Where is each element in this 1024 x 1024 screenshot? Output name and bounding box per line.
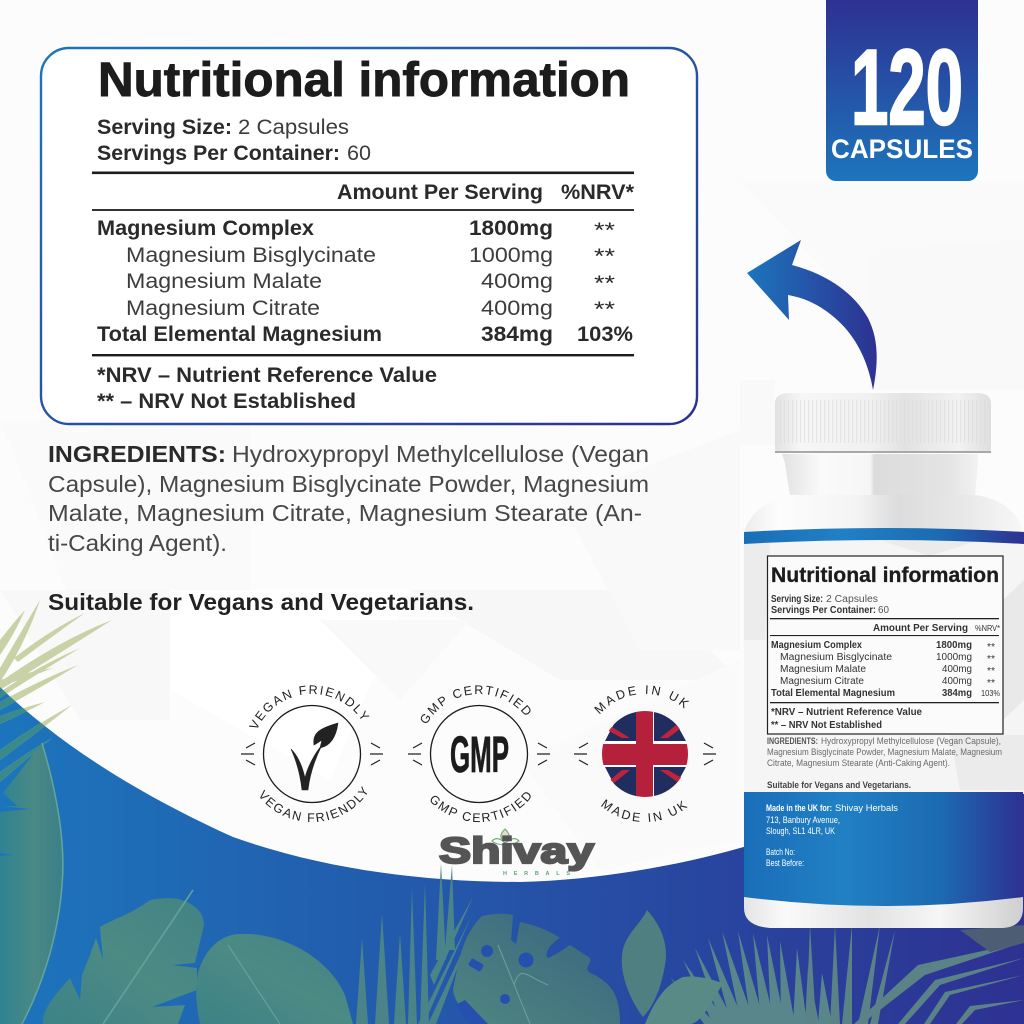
serving size: Servings Per Container: [97,142,340,165]
mini nutrition box: ** [987,666,995,677]
ingredients text: ti-Caking Agent). [48,530,227,556]
mini nutrition box: Amount Per Serving [873,623,968,634]
badge: GMP certified: GMP CERTIFIED [420,685,530,723]
mini nutrition box: ** [987,654,995,665]
arrow pointing to bottle [747,240,877,390]
badge: vegan friendly [241,685,383,822]
ingredients text: Capsule), Magnesium Bisglycinate Powder, Magnesium [48,471,649,497]
table rows: 384mg [481,323,553,346]
badge: made in UK [574,685,716,822]
manufacturer details: Slough, SL1 4LR, UK [766,826,835,837]
label facets [744,540,1024,790]
footnotes [97,364,437,413]
bottle cap [775,393,991,453]
footnotes: ** – NRV Not Established [97,390,356,413]
badge: 120 capsules: CAPSULES [831,134,973,164]
serving size [97,116,371,165]
table rows: ** [594,272,615,295]
serving size: Serving Size: [97,116,232,139]
UK flag icon [600,709,690,799]
manufacturer details: Best Before: [766,858,804,869]
mini nutrition box: 384mg [942,688,972,699]
leaf: banana [43,890,204,1024]
suitability statement: Suitable for Vegans and Vegetarians. [48,589,474,615]
dark corner shadow [960,925,1024,952]
bottle shoulder [744,495,1024,545]
bottle base [744,890,1023,928]
ingredients text [48,441,649,556]
mini ingredients text: INGREDIENTS: [767,735,818,746]
mini nutrition box: ** [987,642,995,653]
table rows: 103% [577,323,633,346]
palm right [806,925,1024,1024]
panel shadow [42,49,698,425]
mini nutrition box: Magnesium Bisglycinate [780,652,893,663]
leaf: round [196,934,353,1024]
leaf: lower right [645,977,723,1024]
badge: GMP certified: GMP [450,726,509,783]
mini nutrition box: Magnesium Citrate [780,676,865,687]
table rows: 400mg [481,297,553,320]
serving size: 2 Capsules [238,116,349,139]
palm fan [670,931,832,1024]
product bottle [744,393,1024,928]
table rows: Magnesium Bisglycinate [126,244,376,267]
vegan leaf check icon [291,723,338,790]
ingredients text: Malate, Magnesium Citrate, Magnesium Stearate (An- [48,500,642,526]
label background [744,538,1024,794]
badge: made in UK: MADE IN UK [601,799,688,822]
panel: nutritional information [41,48,698,425]
mini nutrition box: %NRV* [975,623,1001,633]
badge: GMP certified [408,685,550,822]
badge: vegan friendly: VEGAN FRIENDLY [249,685,370,728]
palm fronds top left [0,600,112,782]
mini nutrition box: Nutritional information [771,564,999,587]
leaf: pointed [622,910,666,1017]
panel box [41,48,697,424]
mini nutrition box: 400mg [942,676,972,687]
badge: vegan friendly: VEGAN FRIENDLY [260,786,368,822]
table rows: Magnesium Citrate [126,297,320,320]
ingredients text: Hydroxypropyl Methylcellulose (Vegan [232,441,649,467]
badge: GMP certified: GMP CERTIFIED [430,792,531,822]
table rows: 1800mg [469,217,553,240]
blue swoosh background [0,687,1024,1024]
ingredients text: INGREDIENTS: [48,441,226,467]
table header: Amount Per Serving [337,181,543,204]
mini nutrition box: *NRV – Nutrient Reference Value [771,707,923,718]
table rows: Total Elemental Magnesium [97,323,382,346]
bottle neck [782,454,978,496]
table header [337,181,635,204]
table header: %NRV* [561,181,635,204]
mini nutrition box: 400mg [942,664,972,675]
serving size: 60 [347,142,371,165]
panel title: Nutritional information [98,54,630,107]
table rows: Magnesium Malate [126,270,322,293]
Shivay Herbals logo: Shivay [439,830,594,871]
mini nutrition box: Serving Size: [771,594,823,605]
table rows: ** [594,219,615,242]
mini nutrition box: Total Elemental Magnesium [771,688,895,699]
mini nutrition box: Servings Per Container: [771,605,876,616]
table rows [97,217,633,346]
manufacturer details: Made in the UK for: [766,803,832,814]
manufacturer details: 713, Banbury Avenue, [766,815,840,826]
lower blue label [744,792,1023,906]
mini nutrition box: ** – NRV Not Established [771,720,882,731]
Shivay Herbals logo [439,829,594,877]
manufacturer details: Shivay Herbals [835,803,898,814]
leaf: monstera [453,914,620,1024]
mini nutrition box: Magnesium Malate [780,664,867,675]
manufacturer details [766,803,898,869]
badge: made in UK: MADE IN UK [594,685,690,714]
mini nutrition box: 2 Capsules [826,594,878,605]
badge: 120 capsules [826,0,978,181]
mini suitability statement: Suitable for Vegans and Vegetarians. [767,779,911,790]
table rows: Magnesium Complex [97,217,314,240]
table rows: ** [594,298,615,321]
grass blades [356,863,473,1024]
mini ingredients text: Citrate, Magnesium Stearate (Anti-Caking Agent). [767,757,950,768]
table rows: ** [594,245,615,268]
blue band [744,528,1024,544]
mini nutrition box: 1800mg [936,640,972,651]
mini nutrition box: Magnesium Complex [771,640,863,651]
lotus icon [492,829,519,845]
mini ingredients text [767,735,1002,768]
mini nutrition box [768,556,1003,734]
mini nutrition box: 60 [878,605,890,616]
mini nutrition box: 103% [981,688,1000,698]
table rows: 400mg [481,270,553,293]
table rows: 1000mg [469,244,553,267]
mini nutrition box: ** [987,678,995,689]
Shivay Herbals logo: HERBALS [503,871,570,877]
leaf: large left [0,743,63,1024]
foliage along the bottom [0,743,1024,1024]
manufacturer details: Batch No: [766,847,795,858]
mini ingredients text: Hydroxypropyl Methylcellulose (Vegan Capsule), [821,735,1001,746]
footnotes: *NRV – Nutrient Reference Value [97,364,437,387]
mini nutrition box: 1000mg [936,652,972,663]
